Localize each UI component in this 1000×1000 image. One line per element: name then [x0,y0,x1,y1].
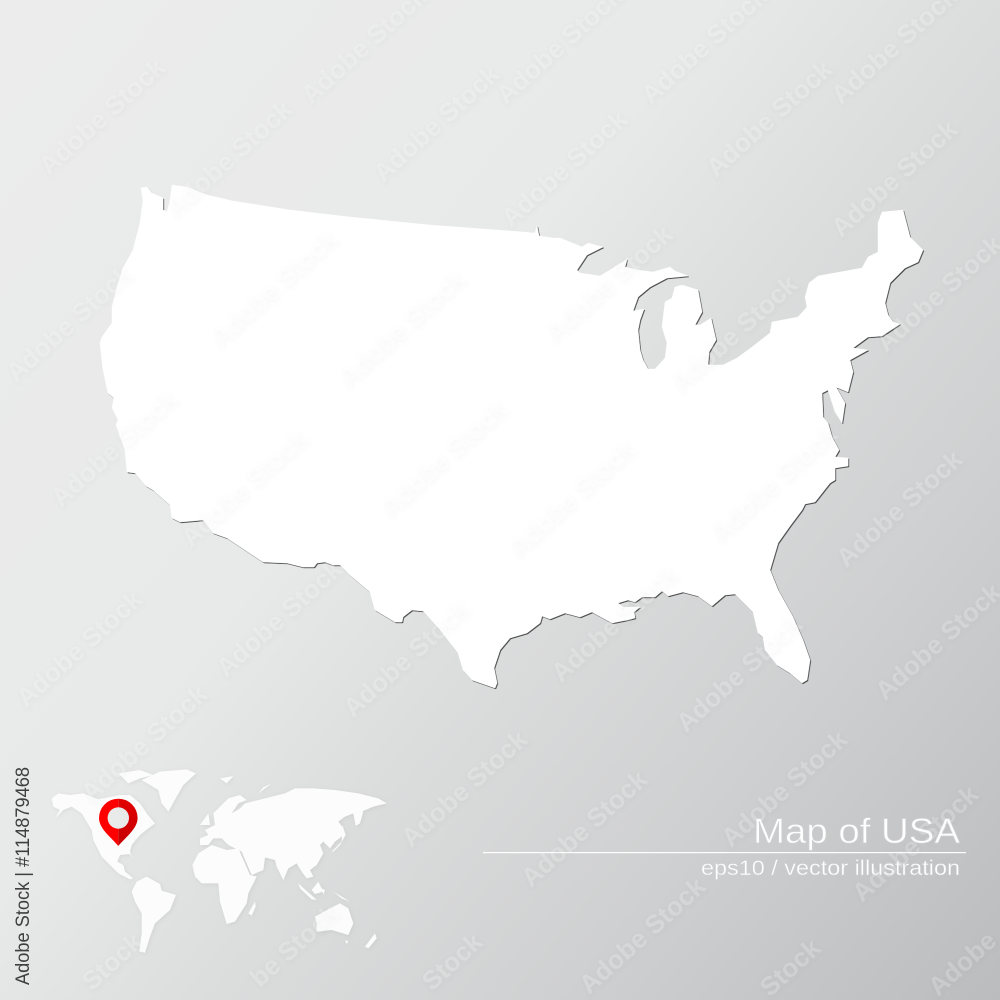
watermark pattern: Adobe Stock [33,52,171,181]
watermark pattern: Adobe Stock [175,424,313,553]
watermark pattern: Adobe Stock [495,104,633,233]
Greenland [142,769,196,812]
watermark pattern: Adobe Stock [573,871,711,1000]
icon: red location pin [99,799,138,846]
Eurasia [200,788,387,880]
watermark pattern: Adobe Stock [160,94,298,223]
title: Map of USA [753,812,961,851]
watermark pattern: Adobe Stock [75,679,213,808]
watermark pattern: Adobe Stock [395,724,533,853]
watermark pattern: Adobe Stock [825,114,963,243]
Madagascar [248,902,256,916]
Japan [332,825,346,852]
watermark pattern: Adobe Stock [705,419,843,548]
watermark pattern: Adobe Stock [10,584,148,713]
subtitle: eps10 / vector illustration [701,857,960,880]
South America [132,877,176,953]
watermark pattern: be Stock [244,898,345,993]
watermark pattern: Adobe Stock [367,59,505,188]
Americas and Arctic [52,769,196,953]
Arctic islands [118,770,153,783]
watermark pattern: Adobe Stock [375,394,513,523]
world map locator [52,769,387,953]
Tasmania [345,940,348,944]
vertical stock credit: Adobe Stock | #114879468 [13,767,34,985]
watermark pattern: Stock [76,926,149,996]
watermark pattern: Adobe Stock [545,559,683,688]
watermark pattern: Adobe Stock [205,224,343,353]
North America [52,793,155,879]
Old World [192,776,387,948]
watermark pattern: Adobe Stock [540,219,678,348]
Iceland [220,776,233,783]
map: contiguous USA [100,185,923,688]
watermark pattern: Adobe Stock [665,269,803,398]
watermark pattern: Adobe Stock [210,554,348,683]
Australia [315,903,353,935]
Novaya Zemlya [258,783,272,793]
watermark pattern: Stock [416,926,489,996]
watermark pattern: Adobe Stock [846,779,984,908]
watermark pattern: Adobe Stock [337,594,475,723]
watermark pattern: Adobe Stock [830,444,968,573]
watermark pattern: Adobe Stock [503,434,641,563]
watermark pattern: Adobe Stock [515,764,653,893]
watermark pattern: Adobe Stock [45,384,183,513]
divider line [483,852,966,853]
watermark pattern: Adobe Stock [670,609,808,738]
Africa [192,845,257,924]
watermark pattern: Adobe Stock [715,724,853,853]
watermark pattern: Adobe Stock [333,264,471,393]
British Isles [200,813,210,825]
watermark pattern: Adobe Stock [700,54,838,183]
watermark pattern: Adobe Stock [0,259,138,388]
Southeast Asia islands [298,882,350,902]
New Zealand [365,933,377,948]
